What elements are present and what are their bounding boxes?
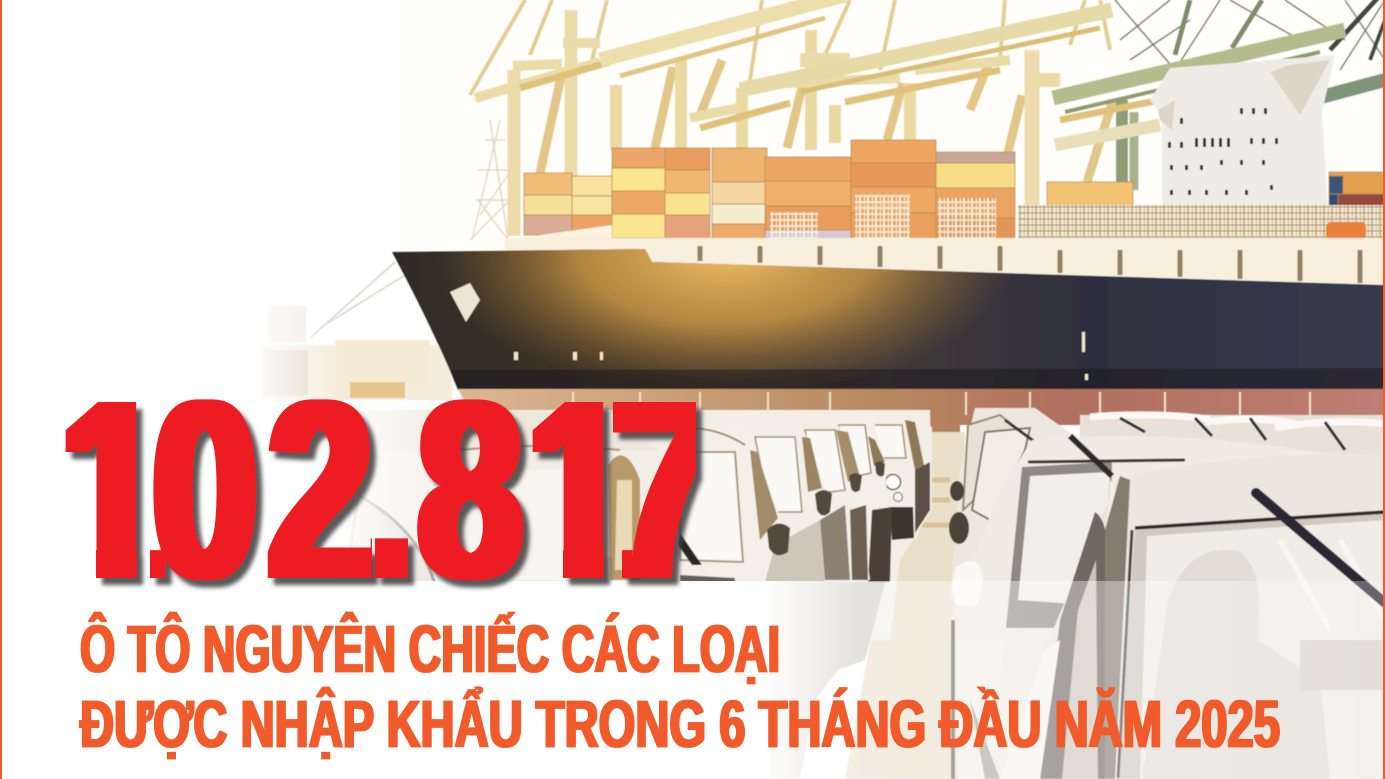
deck railings	[505, 195, 1385, 285]
dark underside	[678, 533, 702, 565]
white fade, left cars	[0, 408, 470, 585]
big number: 102.817: 2	[268, 350, 372, 632]
ship superstructure	[1150, 55, 1335, 232]
frame edge left	[0, 0, 2, 779]
white fade, upper left	[0, 0, 480, 248]
gantry cranes	[470, 0, 1385, 240]
road between car rows	[845, 432, 965, 779]
frame edge right	[1383, 0, 1385, 779]
crane booms	[600, 0, 845, 60]
dark wing mirrors	[767, 461, 885, 555]
bracing and thin lines	[1115, 0, 1385, 70]
nearest right car	[953, 454, 1385, 779]
faded car bodies below the panel line	[770, 582, 885, 779]
big number: 102.817: 1	[527, 350, 631, 632]
big number: 102.817: 8	[418, 350, 522, 632]
vertical crane legs	[514, 10, 571, 236]
hull marks	[514, 332, 1088, 380]
ship hull	[392, 249, 1385, 392]
wheel	[345, 495, 435, 585]
diagonal crane legs	[540, 60, 1113, 182]
big number: 102.817: 0	[153, 350, 257, 632]
waterline shadow	[450, 368, 1385, 392]
second car	[950, 436, 1385, 779]
sky	[400, 0, 1385, 250]
row of cars, far to near	[678, 410, 932, 583]
bow emblem	[450, 283, 480, 322]
car 5, far	[838, 410, 932, 540]
bollards along the quay	[573, 392, 1310, 415]
big number: 102.817: .	[365, 350, 417, 632]
reflected mirror	[608, 455, 640, 580]
car 2	[725, 420, 850, 580]
car rows, left	[330, 409, 932, 779]
wiper	[1256, 493, 1385, 603]
distant cars	[950, 408, 1080, 600]
subtitle line 1: Ô TÔ NGUYÊN CHIẾC CÁC LOẠI	[80, 612, 780, 687]
white panel behind subtitle	[0, 581, 1385, 779]
car rows, right	[949, 408, 1385, 779]
white fade, building	[0, 300, 345, 408]
big number: 102.817	[66, 399, 706, 591]
distant roof row	[1080, 415, 1385, 455]
big number: 102.817: 1	[60, 350, 164, 632]
cargo containers	[524, 140, 1385, 255]
car 3	[760, 416, 870, 580]
red lower hull band	[458, 389, 1385, 433]
car 1, nearest	[680, 428, 825, 582]
port building in the distance	[262, 262, 452, 400]
car 4	[795, 414, 892, 582]
door glass	[1040, 512, 1108, 779]
big number: 102.817: 7	[612, 350, 716, 632]
base of far left cars	[330, 410, 932, 640]
front fender	[1000, 640, 1060, 779]
dark mirrors on distant cars	[949, 512, 969, 544]
seat	[1142, 550, 1330, 779]
crane beams	[475, 43, 1010, 118]
